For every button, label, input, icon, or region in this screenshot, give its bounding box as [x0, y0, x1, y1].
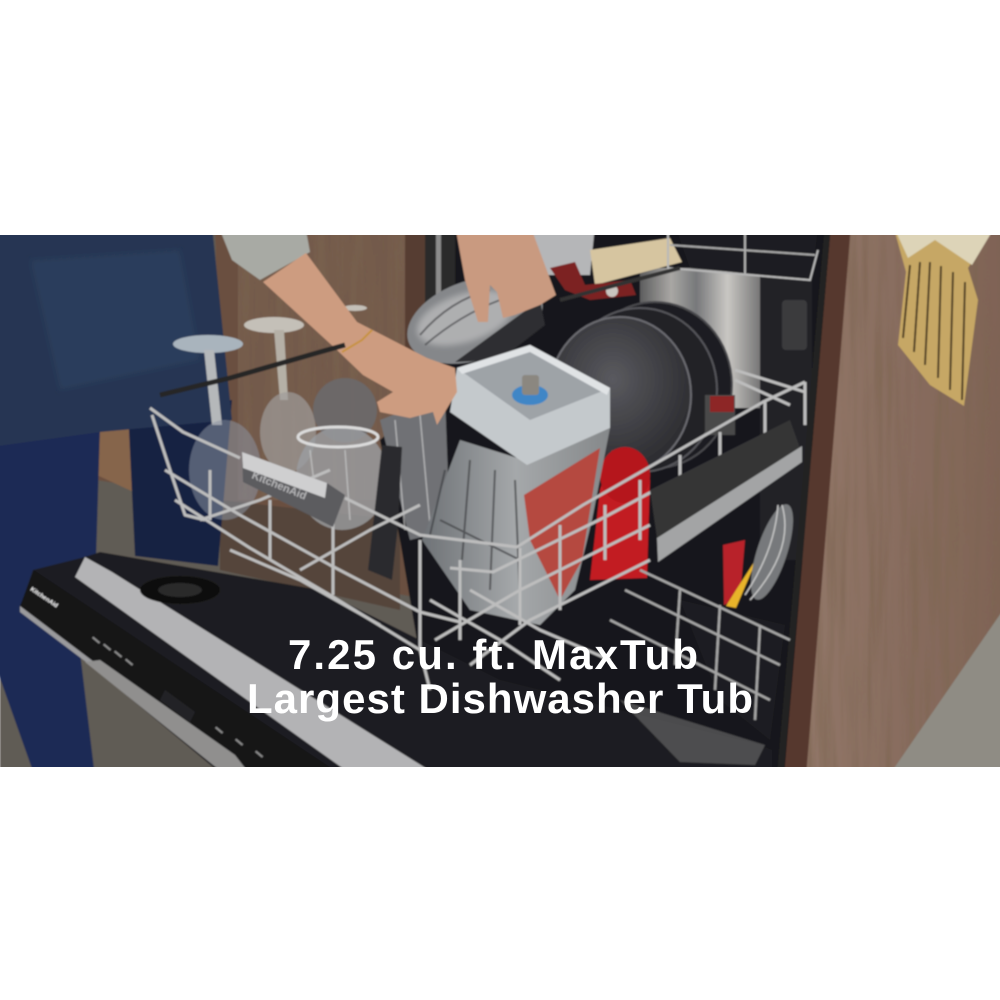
- dark spatula handle: [368, 445, 402, 580]
- photo infographic: dishwasher being loaded: [0, 235, 1000, 767]
- held glass plate: [406, 280, 545, 365]
- rack slide rail: [650, 420, 802, 562]
- right hand: [455, 225, 556, 322]
- arm and hands: [218, 225, 556, 425]
- black plates: [549, 302, 732, 473]
- sweater sleeve: [221, 235, 311, 281]
- upper dish rack: [150, 370, 805, 690]
- KitchenAid rack handle: [242, 452, 345, 527]
- headline: 7.25 cu. ft. MaxTub: [288, 631, 698, 678]
- headline: Largest Dishwasher Tub: [247, 675, 753, 722]
- control panel: [20, 570, 345, 777]
- person: apron: [0, 225, 232, 447]
- glassware: [173, 305, 450, 540]
- stainless steel tub wall: [640, 268, 765, 408]
- door interior: [20, 552, 772, 777]
- lower rack utensil basket: [610, 570, 790, 740]
- striped towel: [895, 235, 992, 406]
- floor and left cabinet background: [0, 225, 440, 777]
- blender jar: [422, 345, 610, 625]
- KitchenAid rack handle: KitchenAid: [250, 470, 308, 503]
- right cabinet: [777, 225, 1000, 777]
- headline: [247, 631, 753, 722]
- red bowl and utensils: [590, 395, 802, 608]
- upper rack with foil, cream dish and red arm: [532, 235, 820, 302]
- person: jeans: [0, 400, 232, 777]
- dishwasher interior: [380, 225, 836, 777]
- rack tine grip: [160, 345, 345, 395]
- forearm and left hand: [263, 253, 457, 425]
- control panel: KitchenAid: [29, 587, 59, 610]
